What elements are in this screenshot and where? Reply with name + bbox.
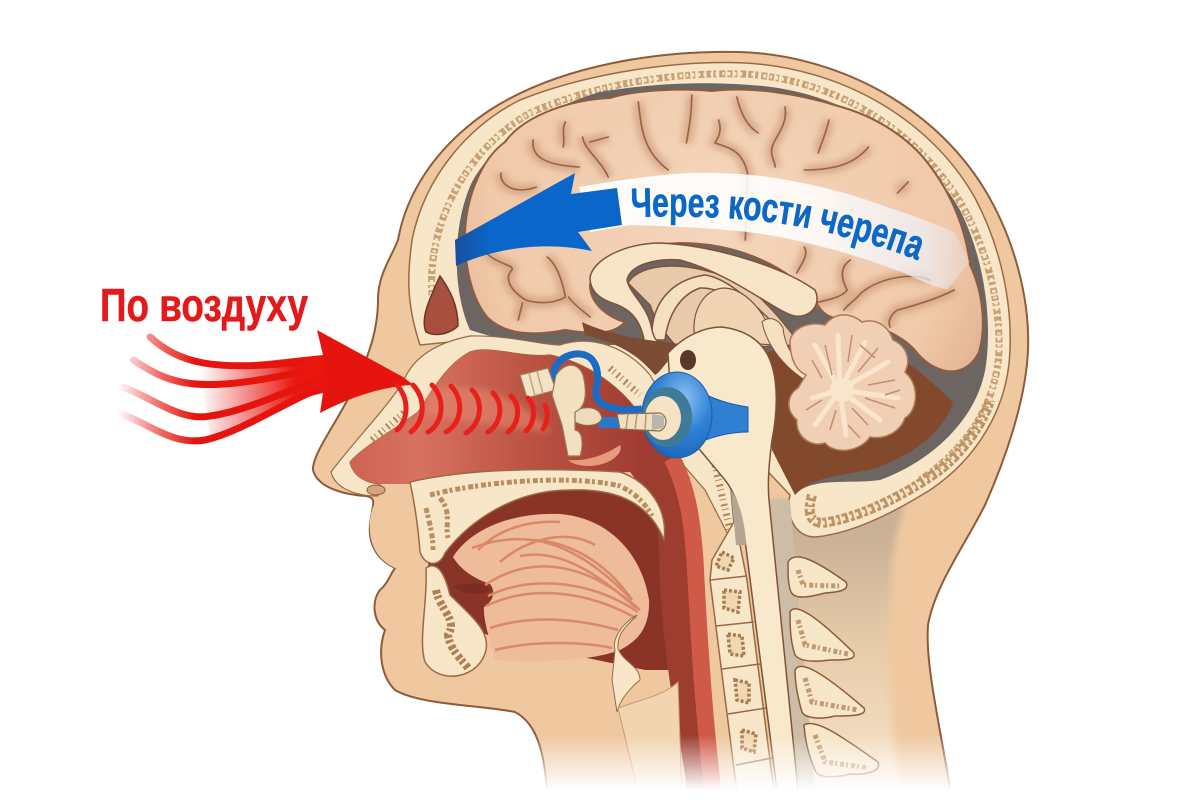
red air arrow xyxy=(117,330,420,441)
sublingual notch xyxy=(454,583,491,594)
incus joint xyxy=(575,408,602,425)
sound wave arcs xyxy=(397,385,547,433)
upper jaw skin xyxy=(370,484,432,568)
vertebral column xyxy=(710,520,775,800)
cranial cavity xyxy=(457,83,988,490)
skull base bone xyxy=(331,336,736,550)
larynx xyxy=(618,682,682,800)
stapes xyxy=(617,413,666,431)
bottom fade xyxy=(520,735,1000,790)
hard palate xyxy=(410,470,665,563)
teal ring xyxy=(642,387,692,447)
ear horn xyxy=(700,392,748,442)
head silhouette xyxy=(313,52,1028,800)
nasal cavity xyxy=(350,350,690,525)
nostril xyxy=(367,485,385,495)
spinous spongy texture xyxy=(798,570,868,768)
oval window xyxy=(645,396,681,440)
gyri lines xyxy=(486,95,954,327)
corpus callosum xyxy=(590,243,817,346)
blue arrow: bone conduction xyxy=(455,173,622,266)
occipital bone spongy end xyxy=(810,400,990,523)
spinal canal gap xyxy=(727,486,746,545)
midbrain arches xyxy=(628,266,800,350)
cerebellar core xyxy=(812,335,898,435)
oral cavity xyxy=(428,480,690,670)
cerebellar core centre xyxy=(830,378,854,402)
tongue xyxy=(453,514,649,661)
cervical canal shading xyxy=(768,500,815,790)
brainstem opening xyxy=(680,350,696,370)
semicircular tube xyxy=(553,354,642,410)
pharynx xyxy=(650,455,714,800)
soft palate xyxy=(568,445,621,466)
gyri shading xyxy=(486,95,954,327)
spinal cord and brainstem xyxy=(668,327,798,790)
nasal passage highlight xyxy=(425,387,552,432)
cochlear ball xyxy=(642,372,712,458)
spongy bone pores xyxy=(432,74,999,480)
stapes link xyxy=(598,417,622,428)
mandible xyxy=(422,566,487,676)
neck tissue behind the spine xyxy=(770,500,905,800)
arrow head xyxy=(317,330,420,413)
band behind bone conduction label xyxy=(579,173,970,290)
sphenoid dark recess xyxy=(582,322,690,375)
cerebellar tentorium xyxy=(768,339,953,495)
label: by air: По воздуху xyxy=(100,279,308,331)
cerebellar folds xyxy=(806,335,900,438)
epiglottis cartilage xyxy=(612,615,640,712)
stream blend xyxy=(200,355,323,436)
cerebellum xyxy=(789,315,916,450)
spinous processes xyxy=(788,557,879,777)
brain xyxy=(465,89,983,371)
incus xyxy=(552,365,585,456)
cerebellar peduncle strip xyxy=(762,319,822,388)
frontal sinus xyxy=(424,276,458,334)
label: through the skull bones: Через кости черепа xyxy=(632,188,922,260)
skull bone xyxy=(409,63,1010,537)
malleus xyxy=(520,368,556,398)
middle ear and blue structure xyxy=(520,354,748,458)
air streams xyxy=(117,337,320,441)
spongy bone texture xyxy=(432,74,999,480)
